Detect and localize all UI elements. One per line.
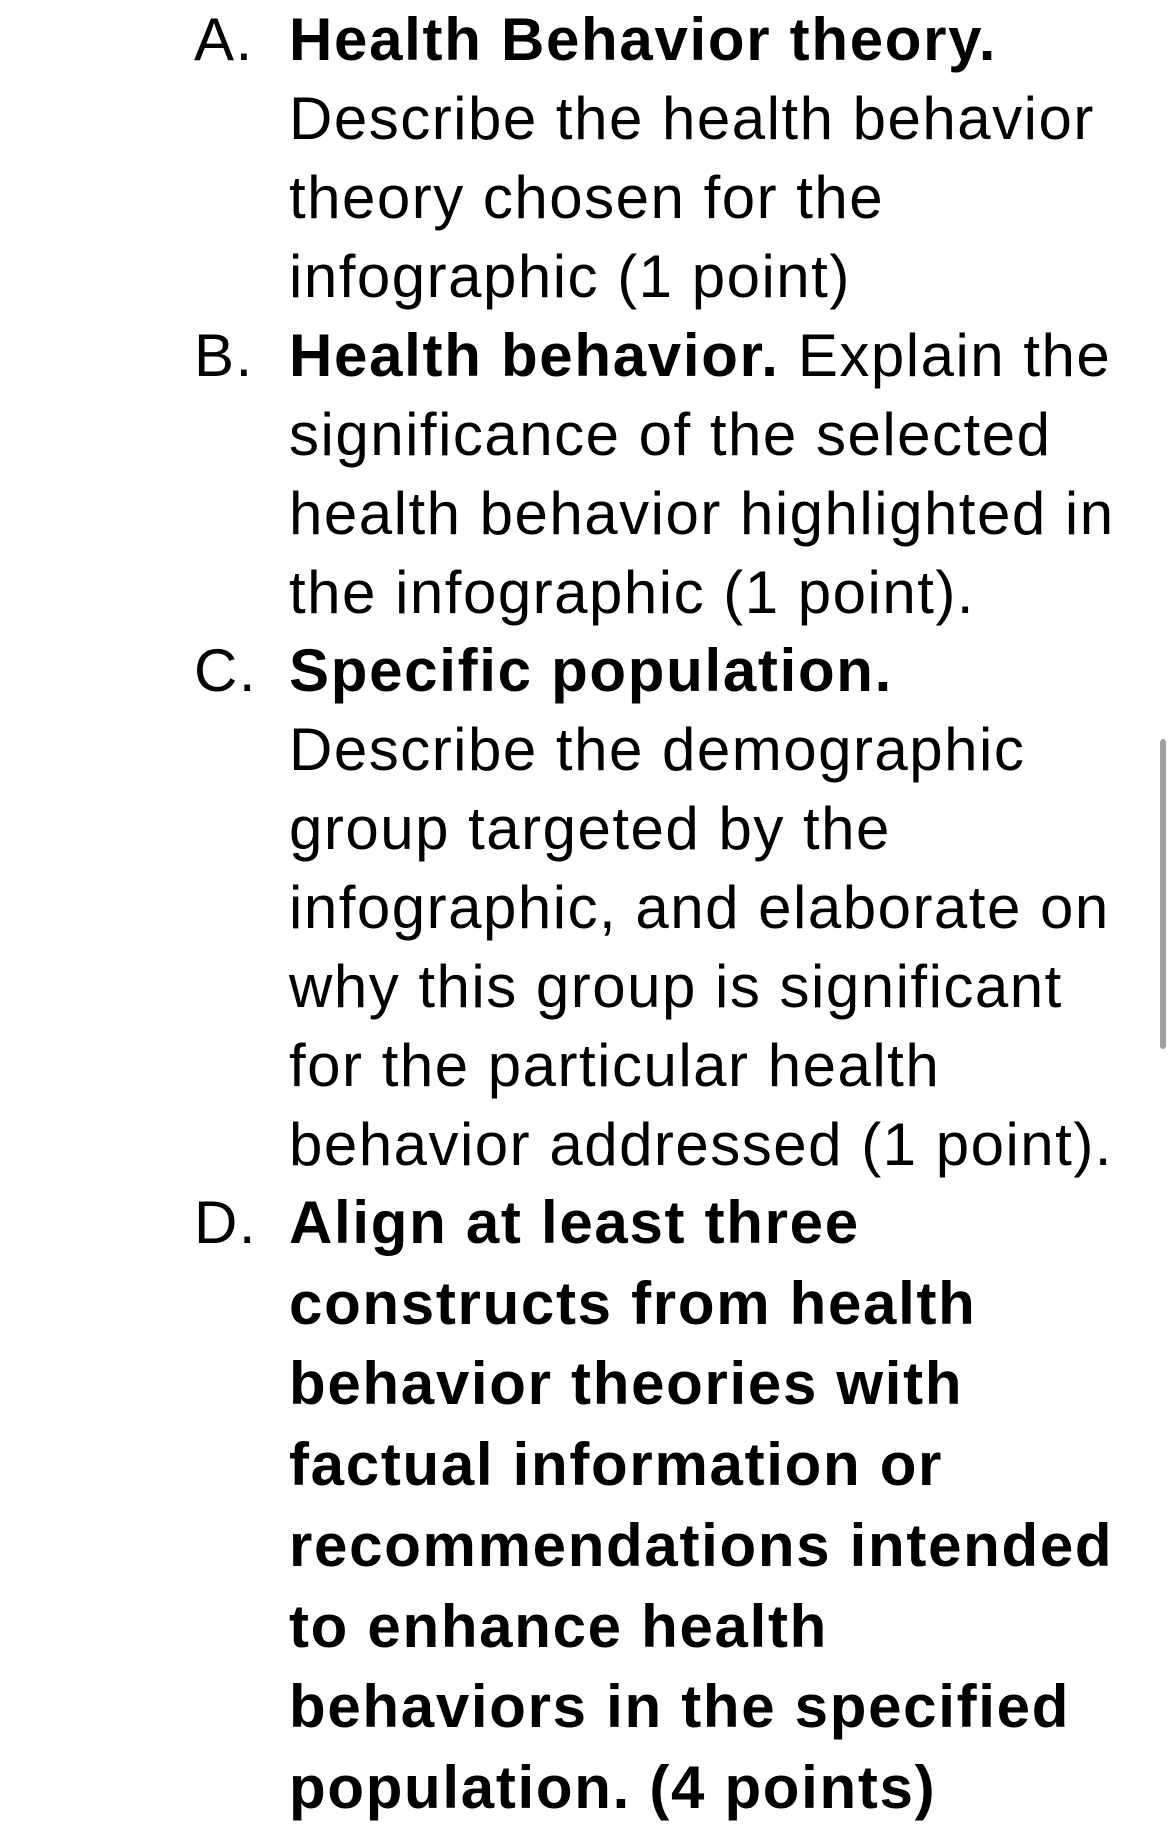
text A: [289, 6, 1095, 310]
text C: Specific population.: [289, 637, 893, 704]
text D: Align at least three: [289, 1189, 860, 1256]
text D: factual information or: [289, 1431, 943, 1498]
letter C: C.: [194, 637, 257, 704]
text C: why this group is significant: [289, 953, 1063, 1020]
text A: Describe the health behavior: [289, 85, 1095, 152]
text C: group targeted by the: [289, 795, 891, 862]
text D: population. (4 points): [289, 1754, 936, 1821]
item B: health behavior: [194, 322, 1115, 626]
text D: [289, 1189, 1113, 1821]
text A: infographic (1 point): [289, 243, 851, 310]
item A: health behavior theory: [194, 6, 1095, 310]
letter B: B.: [194, 322, 254, 389]
text D: behavior theories with: [289, 1350, 963, 1417]
text C: Describe the demographic: [289, 716, 1025, 783]
text D: recommendations intended: [289, 1512, 1113, 1579]
text B: Health behavior. Explain the: [289, 322, 1111, 389]
text B: the infographic (1 point).: [289, 559, 975, 626]
text C: behavior addressed (1 point).: [289, 1111, 1113, 1178]
item C: specific population: [194, 637, 1113, 1178]
text B: health behavior highlighted in: [289, 480, 1115, 547]
text B: significance of the selected: [289, 401, 1051, 468]
text D: to enhance health: [289, 1593, 828, 1660]
text A: theory chosen for the: [289, 164, 884, 231]
scrollbar: [1160, 739, 1166, 1049]
text C: [288, 637, 1113, 1178]
item D: align constructs: [194, 1189, 1113, 1821]
text D: constructs from health: [289, 1270, 976, 1337]
text C: for the particular health: [289, 1032, 940, 1099]
text A: Health Behavior theory.: [289, 6, 997, 73]
text B: [289, 322, 1115, 626]
letter A: A.: [194, 6, 254, 73]
text D: behaviors in the specified: [289, 1673, 1070, 1740]
text C: infographic, and elaborate on: [289, 874, 1110, 941]
letter D: D.: [194, 1189, 257, 1256]
